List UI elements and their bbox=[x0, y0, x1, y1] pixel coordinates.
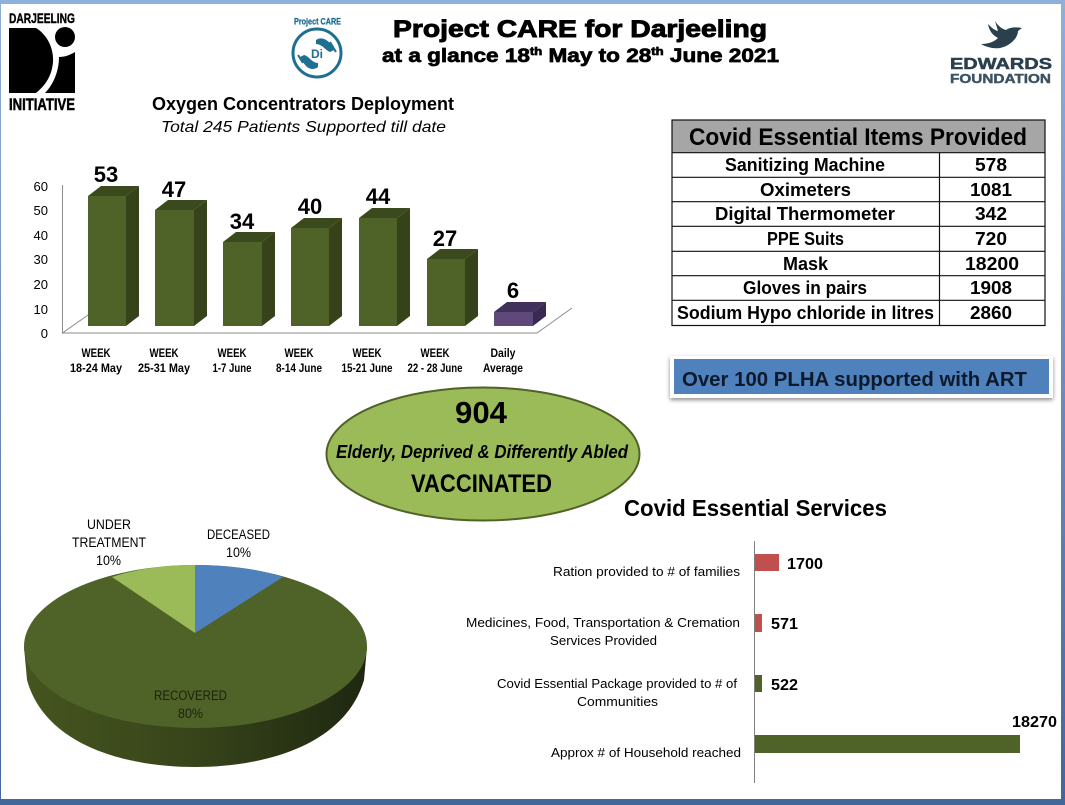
slice: under treatment bbox=[112, 565, 195, 633]
ellipse: vaccinated callout: VACCINATED bbox=[411, 470, 552, 498]
row: ration: Ration provided to # of families bbox=[553, 564, 741, 579]
y axis labels: 60 bbox=[34, 179, 48, 194]
axis bbox=[754, 541, 756, 783]
table rows: 578 bbox=[975, 154, 1007, 175]
bar: 25-31 May bbox=[155, 177, 207, 326]
y axis labels bbox=[34, 179, 48, 341]
table rows: Gloves in pairs bbox=[743, 277, 867, 298]
title: May to 28 bbox=[542, 46, 651, 67]
table rows bbox=[677, 154, 1019, 323]
category labels: Daily bbox=[490, 348, 516, 360]
logo: Darjeeling Initiative: INITIATIVE bbox=[9, 96, 75, 114]
ellipse: vaccinated callout: 904 bbox=[455, 395, 508, 430]
bar: daily average: 6 bbox=[507, 278, 519, 303]
heading: oxygen concentrators: Oxygen Concentrators Deployment bbox=[152, 94, 454, 114]
y axis labels: 0 bbox=[41, 326, 48, 341]
ellipse: vaccinated callout bbox=[326, 388, 640, 520]
category labels: 22 - 28 June bbox=[408, 363, 462, 375]
table rows: 1081 bbox=[970, 179, 1012, 200]
bar: 22-28 June bbox=[427, 226, 478, 326]
table rows: 1908 bbox=[970, 277, 1012, 298]
heading: covid essential services: Covid Essential Services bbox=[624, 495, 887, 521]
table rows: 342 bbox=[975, 203, 1007, 224]
label: recovered bbox=[154, 688, 227, 721]
table: covid essential items bbox=[672, 120, 1045, 326]
title: th bbox=[651, 46, 664, 58]
row: package bbox=[497, 675, 798, 709]
row: package: Communities bbox=[577, 694, 659, 709]
table rows: Oximeters bbox=[760, 179, 851, 200]
y axis labels: 20 bbox=[34, 277, 48, 292]
table rows: 2860 bbox=[970, 302, 1012, 323]
y axis labels: 10 bbox=[34, 302, 48, 317]
logo: Darjeeling Initiative bbox=[9, 10, 75, 114]
title: Project CARE for Darjeeling bbox=[393, 16, 767, 43]
table rows: Digital Thermometer bbox=[715, 203, 895, 224]
label: under treatment bbox=[72, 517, 146, 568]
category labels: 1-7 June bbox=[212, 363, 252, 375]
table rows: PPE Suits bbox=[767, 228, 844, 249]
label: deceased: 10% bbox=[226, 545, 251, 560]
row: households: Approx # of Household reached bbox=[551, 745, 741, 760]
title: at a glance 18 bbox=[382, 46, 507, 67]
category labels: WEEK bbox=[218, 348, 247, 360]
y axis labels: 50 bbox=[34, 203, 48, 218]
category labels: WEEK bbox=[352, 348, 382, 360]
row: households bbox=[551, 714, 1057, 760]
row: package: Covid Essential Package provided to # of bbox=[497, 676, 737, 691]
category labels: WEEK bbox=[420, 348, 450, 360]
bar: 22-28 June: 27 bbox=[433, 226, 457, 251]
logo: Darjeeling Initiative: DARJEELING bbox=[9, 10, 75, 26]
row: package: 522 bbox=[771, 677, 798, 694]
bar: 18-24 May: 53 bbox=[94, 162, 118, 187]
table rows: Sanitizing Machine bbox=[725, 154, 885, 175]
category labels: 15-21 June bbox=[342, 363, 392, 375]
label: recovered: RECOVERED bbox=[154, 688, 227, 703]
category labels: WEEK bbox=[82, 348, 111, 360]
pie side wall bbox=[24, 647, 367, 767]
logo: Project CARE bbox=[293, 16, 341, 77]
ellipse: vaccinated callout: Elderly, Deprived & Differently Abled bbox=[336, 442, 629, 462]
label: recovered: 80% bbox=[178, 706, 203, 721]
bar: daily average bbox=[494, 278, 546, 326]
row: households: 18270 bbox=[1012, 714, 1057, 731]
horizontal bar chart: essential services bbox=[466, 541, 1057, 783]
label: deceased bbox=[207, 527, 270, 560]
title: th bbox=[530, 46, 543, 58]
bar: 1-7 June bbox=[223, 209, 275, 326]
category labels: WEEK bbox=[150, 348, 179, 360]
label: deceased: DECEASED bbox=[207, 527, 270, 542]
callout: PLHA supported: Over 100 PLHA supported with ART bbox=[682, 368, 1027, 391]
label: under treatment: TREATMENT bbox=[72, 535, 146, 550]
table rows: Mask bbox=[783, 253, 829, 274]
category labels bbox=[70, 348, 523, 375]
logo: Edwards Foundation bbox=[950, 21, 1052, 86]
row: ration: 1700 bbox=[787, 556, 823, 573]
table rows: 720 bbox=[975, 228, 1007, 249]
table rows: 18200 bbox=[965, 253, 1019, 274]
row: medicines: 571 bbox=[771, 616, 798, 633]
table header: Covid Essential Items Provided bbox=[689, 124, 1027, 151]
slice: deceased bbox=[195, 565, 283, 633]
bar: 8-14 June bbox=[291, 194, 342, 326]
label: under treatment: UNDER bbox=[87, 517, 131, 532]
category labels: 8-14 June bbox=[276, 363, 322, 375]
title bbox=[382, 16, 780, 67]
bar: 15-21 June bbox=[359, 184, 410, 326]
row: medicines bbox=[466, 614, 798, 648]
category labels: WEEK bbox=[284, 348, 314, 360]
subheading: total patients: Total 245 Patients Supported till date bbox=[161, 119, 446, 136]
slice: recovered bbox=[24, 565, 367, 728]
category labels: Average bbox=[483, 363, 523, 375]
label: under treatment: 10% bbox=[96, 553, 121, 568]
logo: Project CARE: Di bbox=[311, 47, 323, 61]
category labels: 25-31 May bbox=[138, 363, 191, 375]
y axis labels: 40 bbox=[34, 228, 48, 243]
logo: Edwards Foundation: FOUNDATION bbox=[950, 72, 1051, 86]
chart axes bbox=[62, 185, 572, 333]
bar: 25-31 May: 47 bbox=[162, 177, 186, 202]
y axis labels: 30 bbox=[34, 252, 48, 267]
title: June 2021 bbox=[664, 46, 780, 67]
bar: 1-7 June: 34 bbox=[230, 209, 255, 234]
logo: Edwards Foundation: EDWARDS bbox=[950, 56, 1052, 73]
bar: 8-14 June: 40 bbox=[298, 194, 322, 219]
bar: 15-21 June: 44 bbox=[366, 184, 391, 209]
table rows: Sodium Hypo chloride in litres bbox=[677, 302, 934, 323]
bar: 18-24 May bbox=[88, 162, 139, 326]
pie chart: patient outcomes bbox=[24, 517, 367, 767]
heading: oxygen concentrators bbox=[152, 94, 454, 136]
category labels: 18-24 May bbox=[70, 363, 123, 375]
row: ration bbox=[553, 554, 823, 579]
row: medicines: Services Provided bbox=[550, 633, 657, 648]
logo: Project CARE: Project CARE bbox=[294, 16, 341, 26]
3D bar chart: weekly deployment bbox=[34, 162, 572, 375]
row: medicines: Medicines, Food, Transportation & Cremation bbox=[466, 615, 740, 630]
callout: PLHA supported bbox=[670, 356, 1053, 398]
